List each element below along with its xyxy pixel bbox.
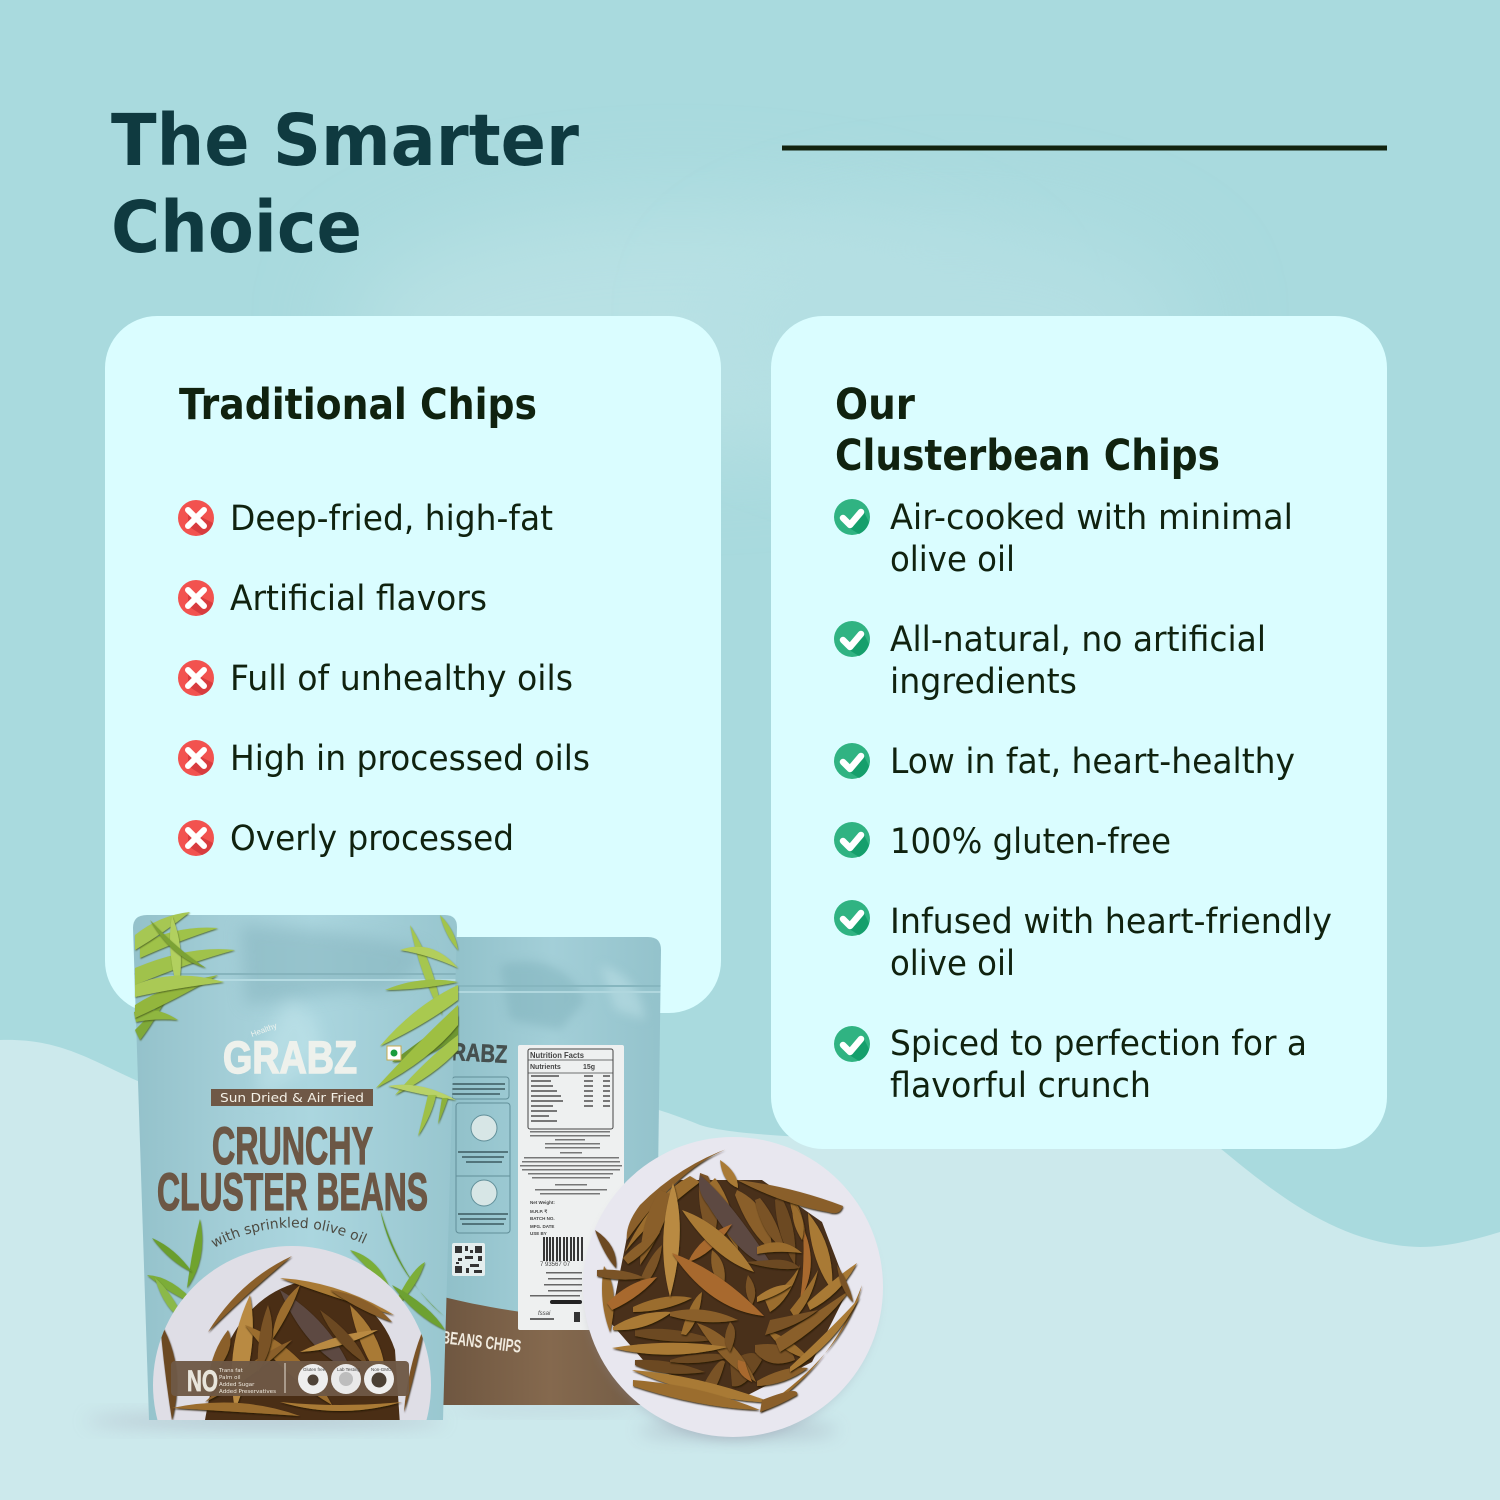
claims bar: Added Preservatives	[219, 1389, 276, 1395]
title	[111, 99, 579, 269]
brand logo: GRABZ	[223, 1032, 357, 1083]
item: infused: Infused with heart-friendly	[890, 902, 1332, 942]
item: artificial flavors: Artificial flavors	[230, 579, 487, 619]
panel: our clusterbean chips	[771, 316, 1387, 1149]
bag plate	[153, 1246, 431, 1420]
heading: our clusterbean chips	[835, 380, 1220, 481]
claims bar: Trans fat	[218, 1368, 244, 1374]
bag top-left beans	[134, 912, 235, 1040]
QR code	[452, 1243, 485, 1276]
title rule	[782, 146, 1387, 150]
nutrition label: MFG. DATE	[530, 1224, 554, 1229]
front of pouch	[133, 912, 460, 1420]
bag plate chips	[160, 1256, 425, 1425]
barcode: 7 93567 07	[540, 1262, 571, 1268]
nutrition label: fssai	[538, 1311, 551, 1317]
title: Choice	[111, 186, 362, 269]
claims bar: NO	[187, 1365, 218, 1398]
nutrition label: M.R.P. ₹	[530, 1209, 548, 1214]
item: spiced	[834, 1024, 1307, 1106]
badge: gluten free	[298, 1364, 328, 1394]
product name	[157, 1117, 428, 1222]
panel: traditional chips	[105, 316, 721, 1013]
nutrition label	[518, 1045, 624, 1330]
claims bar: Palm oil	[219, 1375, 241, 1381]
item: processed oils: High in processed oils	[230, 739, 590, 779]
back pouch logo: RABZ	[451, 1038, 508, 1069]
item: deep-fried: Deep-fried, high-fat	[230, 499, 553, 539]
nutrition label: USE BY	[530, 1231, 547, 1236]
heading: traditional chips: Traditional Chips	[179, 380, 537, 430]
item: overly processed: Overly processed	[230, 819, 514, 859]
item: low in fat: Low in fat, heart-healthy	[890, 742, 1295, 782]
tagline curve	[214, 1227, 368, 1248]
nutrition label: Net Weight:	[530, 1200, 555, 1205]
nutrition label: 15g	[583, 1064, 595, 1071]
badge: lab testing: Lab Testing	[337, 1367, 360, 1372]
claims bar: Added Sugar	[219, 1382, 255, 1388]
item: infused	[834, 900, 1332, 984]
india veg mark	[387, 1046, 401, 1060]
item: unhealthy oils: Full of unhealthy oils	[230, 659, 573, 699]
brand logo: Healthy	[250, 1021, 278, 1039]
product name: CLUSTER BEANS	[157, 1163, 428, 1222]
item: spiced: flavorful crunch	[890, 1066, 1151, 1106]
nutrition label: Nutrition Facts	[530, 1050, 584, 1060]
product name: CRUNCHY	[212, 1117, 373, 1176]
plate of chips	[583, 1137, 883, 1440]
item: spiced: Spiced to perfection for a	[890, 1024, 1307, 1064]
badge: gluten free: Gluten free	[303, 1367, 326, 1372]
badge: non-gmo: Non-GMO	[371, 1367, 392, 1372]
item: all-natural: ingredients	[890, 662, 1077, 702]
item: air-cooked: olive oil	[890, 540, 1015, 580]
back pouch info boxes	[452, 1077, 510, 1233]
item: air-cooked: Air-cooked with minimal	[890, 498, 1293, 538]
badge: non-gmo	[364, 1364, 394, 1394]
item: infused: olive oil	[890, 944, 1015, 984]
badge: lab testing	[331, 1364, 361, 1394]
item: all-natural	[834, 620, 1266, 702]
heading: our clusterbean chips: Our	[835, 380, 916, 430]
chips	[595, 1147, 862, 1412]
back of pouch	[133, 912, 883, 1442]
back pouch text: BEANS CHIPS	[441, 1327, 522, 1357]
item: air-cooked	[834, 498, 1293, 580]
item: gluten-free: 100% gluten-free	[890, 822, 1171, 862]
nutrition label: Nutrients	[530, 1064, 561, 1071]
shadow under product	[85, 1404, 838, 1438]
bag top-right beans	[376, 915, 458, 1136]
heading: our clusterbean chips: Clusterbean Chips	[835, 431, 1220, 481]
item: all-natural: All-natural, no artificial	[890, 620, 1266, 660]
icon: lower green beans	[147, 1209, 445, 1330]
barcode	[540, 1237, 582, 1268]
plate	[583, 1137, 883, 1437]
claims bar	[171, 1361, 409, 1398]
title: The Smarter	[111, 99, 579, 182]
tagline: with sprinkled olive oil	[211, 1216, 368, 1247]
sun dried tag: Sun Dried & Air Fried	[220, 1090, 364, 1105]
nutrition label: BATCH NO.	[530, 1216, 555, 1221]
